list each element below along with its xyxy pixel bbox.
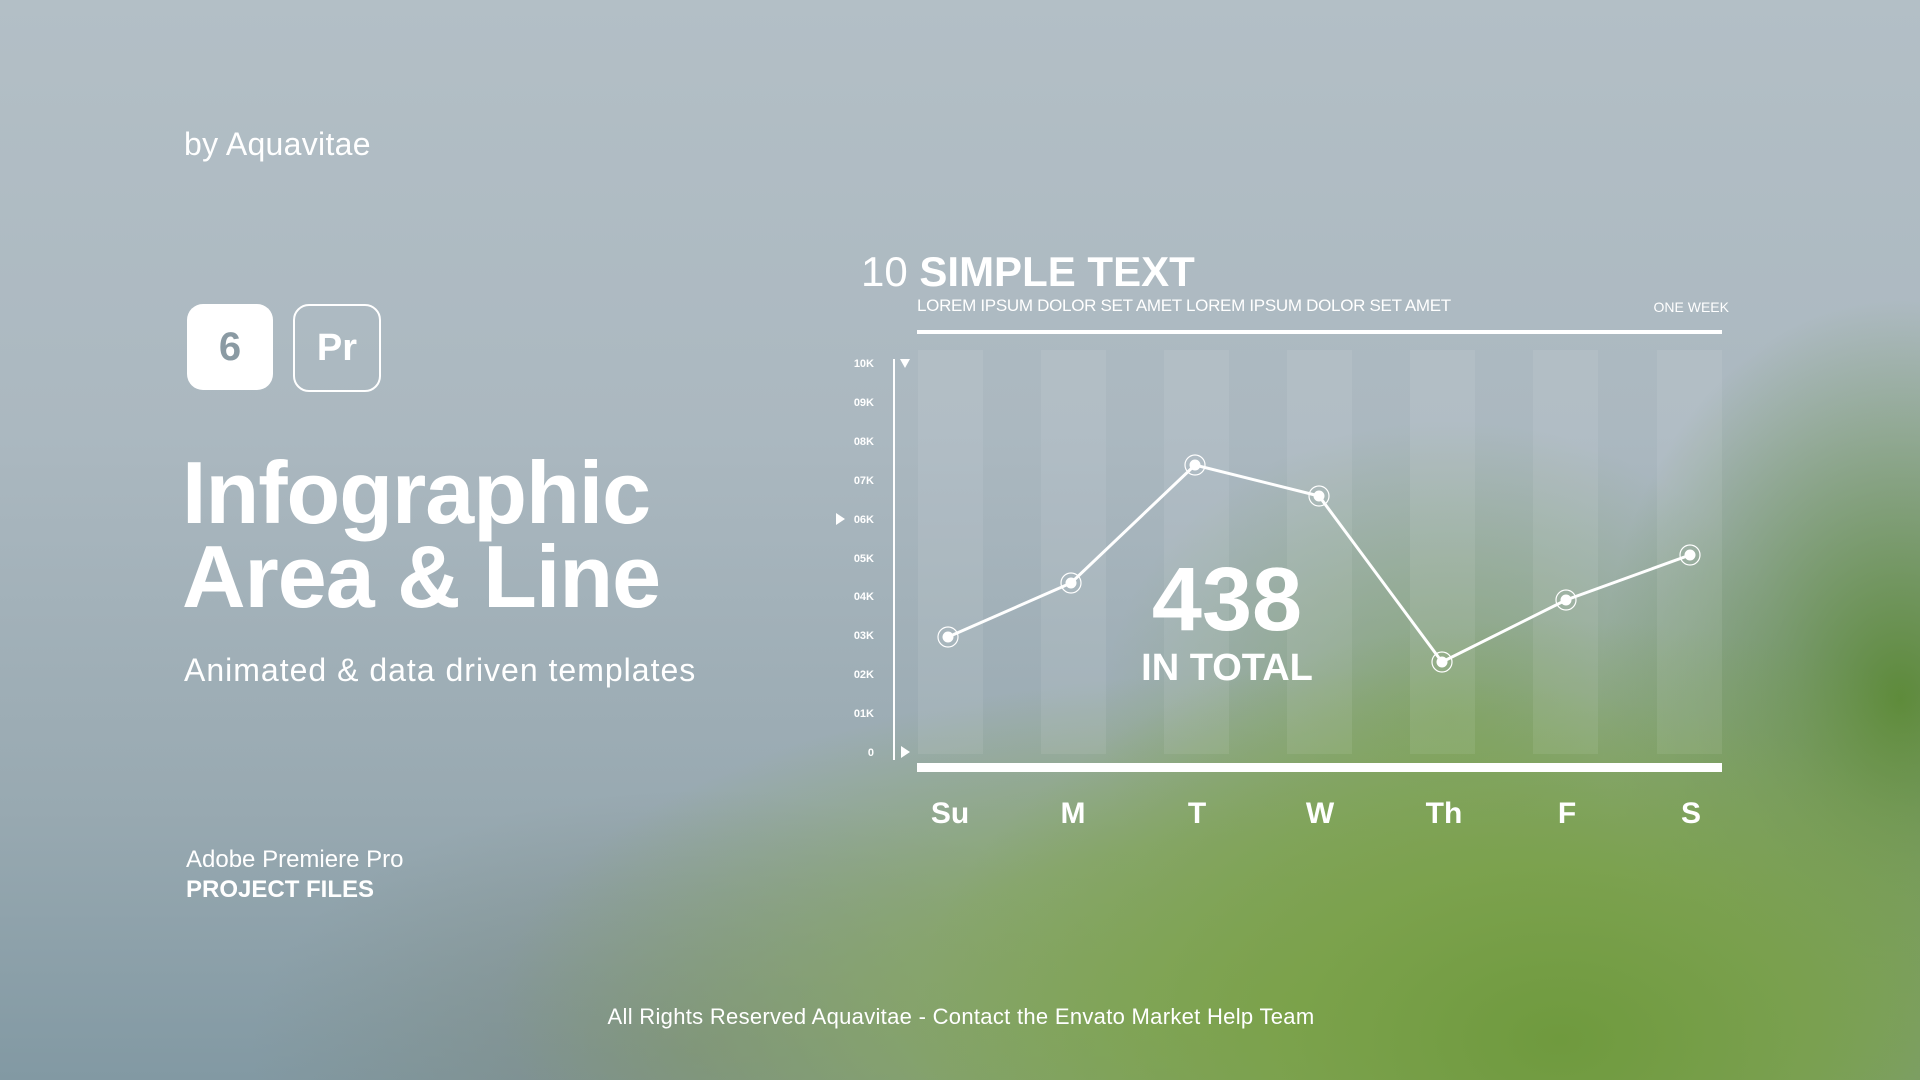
chart: 10K [854, 358, 874, 370]
byline: by Aquavitae [184, 126, 371, 162]
main title: Area & Line [182, 527, 660, 626]
text: W [1306, 797, 1334, 830]
total label: IN TOTAL [1141, 647, 1313, 689]
chart: 03K [854, 630, 874, 642]
chart: 02K [854, 669, 874, 681]
text: T [1188, 797, 1206, 830]
main title: Infographic [182, 443, 650, 542]
project files text [186, 846, 403, 903]
text: M [1060, 797, 1086, 830]
subtitle: Animated & data driven templates [184, 652, 696, 688]
day labels [931, 797, 1701, 830]
text: F [1558, 797, 1576, 830]
footer: All Rights Reserved Aquavitae - Contact the Envato Market Help Team [608, 1004, 1314, 1029]
text: Su [931, 797, 969, 830]
period label: ONE WEEK [1654, 299, 1729, 315]
text: Th [1426, 797, 1462, 830]
badge: 6: 6 [219, 325, 241, 369]
chart subheading: LOREM IPSUM DOLOR SET AMET LOREM IPSUM DOLOR SET AMET [917, 296, 1451, 315]
chart: 08K [854, 436, 874, 448]
project files text: PROJECT FILES [186, 876, 374, 903]
main title [182, 443, 660, 626]
chart: 01K [854, 708, 874, 720]
total value: 438 [1152, 550, 1302, 650]
badge: Pr: Pr [317, 327, 357, 369]
badge: Pr [293, 304, 381, 392]
chart: 0 [868, 747, 874, 759]
project files text: Adobe Premiere Pro [186, 846, 403, 873]
chart: 05K [854, 553, 874, 565]
chart: 07K [854, 475, 874, 487]
badge: 6 [187, 304, 273, 390]
chart: 04K [854, 591, 874, 603]
text: S [1681, 797, 1701, 830]
chart: 06K [854, 514, 874, 526]
chart: 09K [854, 397, 874, 409]
chart heading: 10 SIMPLE TEXT [861, 248, 1195, 295]
